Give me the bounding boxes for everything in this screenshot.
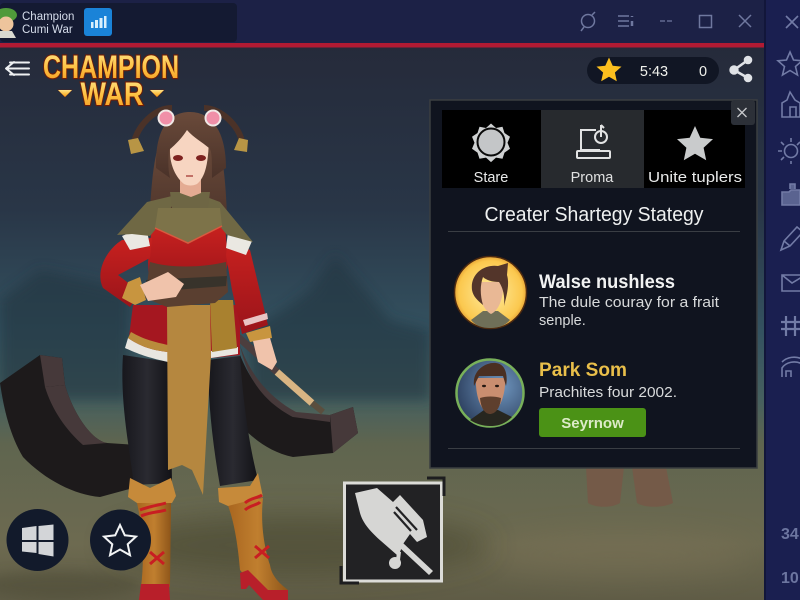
sidebar icon: grid	[781, 316, 800, 336]
hair back	[147, 140, 228, 232]
button: Seyrnow	[539, 408, 646, 437]
window title bar: Cumi War	[22, 24, 73, 36]
neck and head	[156, 112, 226, 197]
left boot	[128, 478, 176, 600]
icon: share	[730, 56, 752, 82]
tab: Stare	[442, 110, 541, 188]
person: Park Som: Prachites four 2002.	[539, 385, 677, 401]
sidebar icon: bridge	[782, 357, 800, 377]
hands and bracelet	[122, 272, 277, 370]
panel: strategy	[430, 100, 757, 468]
weapon: handle	[238, 337, 323, 412]
app avatar icon	[0, 8, 17, 38]
arms	[100, 226, 272, 342]
round button: windows	[6, 509, 68, 571]
window control icons	[581, 12, 751, 31]
right boot	[218, 473, 288, 600]
avatar: Park Som	[456, 360, 524, 426]
weapon glyph	[355, 488, 433, 575]
icon: gold star	[597, 58, 622, 81]
sidebar number 34: 34	[781, 526, 799, 543]
app chart icon	[84, 8, 112, 36]
sidebar icon: mail	[782, 275, 800, 291]
logo: Champion War	[43, 49, 179, 112]
person: Park Som	[539, 360, 677, 401]
score pill	[587, 57, 719, 84]
panel close button	[731, 100, 755, 125]
panel heading: Creater Shartegy Stategy	[484, 204, 704, 226]
round button: star	[90, 510, 151, 570]
tab: Proma	[541, 110, 644, 188]
logo: Champion War: CHAMPION	[43, 49, 179, 85]
person: Walse nushless	[539, 272, 719, 329]
person: Park Som: Park Som	[539, 360, 627, 381]
sidebar icon: close	[786, 16, 798, 28]
window title bar	[0, 0, 765, 43]
legs	[122, 355, 258, 486]
sidebar number 10: 10	[781, 570, 799, 587]
sidebar icon: pencil	[781, 227, 800, 250]
red accent line	[0, 43, 764, 48]
score: 0	[699, 64, 707, 80]
sidebar icon: castle	[782, 92, 800, 117]
hair ties	[128, 108, 248, 154]
tab: Unite tuplers	[644, 110, 745, 188]
back arrow icon	[6, 62, 29, 75]
button: Seyrnow: Seyrnow	[561, 415, 624, 432]
person: Walse nushless: Walse nushless	[539, 272, 675, 293]
timer: 5:43	[640, 64, 668, 80]
logo: Champion War: WAR	[80, 76, 144, 112]
weapon: right blade	[240, 345, 358, 457]
character with weapon	[0, 108, 358, 600]
weapon: left blade	[0, 355, 137, 497]
skirt	[125, 300, 240, 362]
tab: Proma: Proma	[571, 170, 614, 186]
tab: Unite tuplers: Unite tuplers	[648, 169, 742, 186]
sidebar icon: star	[778, 52, 800, 75]
shoulder armor	[117, 192, 253, 244]
avatar: Walse nushless	[454, 256, 526, 328]
front sash	[167, 305, 211, 495]
hair buns	[158, 110, 220, 126]
item card: weapon icon	[341, 478, 444, 583]
app name: Champion	[22, 11, 74, 23]
sidebar icon: bag	[782, 184, 800, 205]
right sidebar	[764, 0, 800, 600]
person: Walse nushless: senple.	[539, 313, 586, 329]
sidebar icon: sun	[778, 138, 800, 164]
torso	[145, 225, 228, 307]
person: Walse nushless: The dule couray for a frait	[539, 295, 719, 311]
tab: Stare: Stare	[474, 170, 508, 186]
